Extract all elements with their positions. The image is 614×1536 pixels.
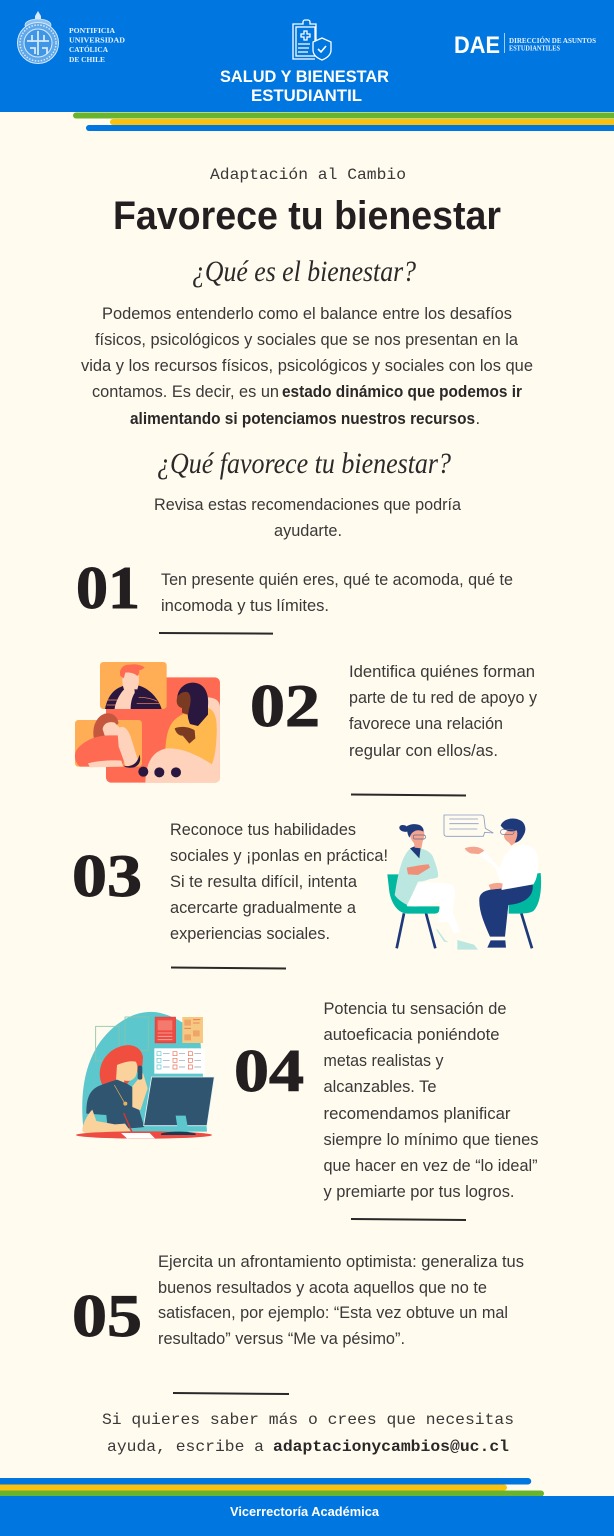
icon: clipboard with shield (293, 20, 331, 60)
item 04 (76, 1000, 538, 1201)
illustration: video call (75, 662, 220, 783)
text 03: sociales y ¡ponlas en práctica! (170, 847, 388, 865)
closing contact message: adaptacionycambios@uc.cl (273, 1438, 509, 1456)
text 05: resultado” versus “Me va pésimo”. (158, 1330, 405, 1348)
text 04: autoeficacia poniéndote (324, 1026, 500, 1044)
text 05: Ejercita un afrontamiento optimista: generaliza tus (158, 1253, 524, 1271)
text 03: experiencias sociales. (170, 925, 330, 943)
girl (93, 713, 119, 750)
text 03: acercarte gradualmente a (170, 899, 357, 917)
header band (0, 0, 614, 112)
text 03: Si te resulta difícil, intenta (170, 873, 358, 891)
text 01: incomoda y tus límites. (161, 597, 329, 615)
text 04: Potencia tu sensación de (324, 1000, 506, 1018)
text 03 (170, 821, 388, 943)
text 05: satisfacen, por ejemplo: “Esta vez obtuve un mal (158, 1304, 508, 1322)
illustration: woman at computer (76, 1012, 214, 1139)
heading: what is wellbeing: ¿Qué es el bienestar? (192, 255, 416, 288)
subtitle: Adaptación al Cambio (210, 166, 406, 184)
university name: PONTIFICIA (69, 26, 116, 35)
closing contact message: Si quieres saber más o crees que necesitas (102, 1411, 514, 1429)
text 04: siempre lo mínimo que tienes (324, 1131, 538, 1149)
illustration: two people talking (387, 815, 541, 950)
intro paragraph: físicos, psicológicos y sociales que se nos presentan en la (95, 331, 519, 349)
closing contact message (102, 1411, 514, 1456)
footer band (0, 1496, 614, 1536)
number 05: 05 (72, 1283, 142, 1349)
item 01 (76, 555, 513, 621)
text 01 (161, 571, 513, 615)
item 02 (75, 662, 538, 783)
text 03: Reconoce tus habilidades (170, 821, 356, 839)
text 02: parte de tu red de apoyo y (349, 689, 538, 707)
text 04 (324, 1000, 538, 1201)
text 04: que hacer en vez de “lo ideal” (324, 1157, 538, 1175)
intro paragraph: . (476, 410, 480, 428)
main title: Favorece tu bienestar (113, 194, 501, 238)
text 04: y premiarte por tus logros. (324, 1183, 514, 1201)
text 02: favorece una relación (349, 715, 503, 733)
program title: SALUD Y BIENESTAR (220, 68, 389, 86)
program title (220, 68, 389, 105)
text 04: metas realistas y (324, 1052, 444, 1070)
text 05 (158, 1253, 524, 1348)
footer band: Vicerrectoría Académica (230, 1504, 380, 1519)
text 04: recomendamos planificar (324, 1105, 511, 1123)
recommendation intro: ayudarte. (274, 522, 342, 540)
DAE logo: DAE (454, 32, 500, 59)
recommendation intro: Revisa estas recomendaciones que podría (154, 496, 462, 514)
number 01: 01 (76, 555, 140, 621)
intro paragraph: alimentando si potenciamos nuestros recursos (130, 410, 475, 428)
closing contact message: ayuda, escribe a (107, 1438, 264, 1456)
university name: DE CHILE (69, 55, 105, 64)
item 05 (72, 1253, 524, 1349)
item 03 (72, 815, 541, 950)
bottom coloured stripes (0, 1478, 544, 1496)
heading: what favours wellbeing: ¿Qué favorece tu bienestar? (157, 447, 451, 480)
icon: university crest (18, 11, 58, 64)
text 02 (349, 663, 538, 760)
intro paragraph: vida y los recursos físicos, psicológicos y sociales con los que (81, 357, 533, 375)
university name: CATÓLICA (69, 44, 109, 54)
intro paragraph: estado dinámico que podemos ir (282, 383, 523, 401)
intro paragraph: Podemos entenderlo como el balance entre los desafíos (102, 305, 512, 323)
university name: UNIVERSIDAD (69, 36, 125, 44)
text 04: alcanzables. Te (324, 1078, 436, 1096)
DAE logo: DIRECCIÓN DE ASUNTOS (509, 37, 596, 45)
text 02: regular con ellos/as. (349, 742, 498, 760)
intro paragraph: contamos. Es decir, es un (92, 383, 279, 401)
text 05: buenos resultados y acota aquellos que no te (158, 1279, 487, 1297)
top coloured stripes (73, 112, 614, 131)
number 02: 02 (250, 673, 320, 739)
number 04: 04 (234, 1038, 304, 1104)
DAE logo: ESTUDIANTILES (509, 44, 560, 52)
text 01: Ten presente quién eres, qué te acomoda, qué te (161, 571, 513, 589)
intro paragraph (81, 305, 533, 428)
program title: ESTUDIANTIL (251, 87, 362, 105)
woman (165, 708, 217, 767)
text 02: Identifica quiénes forman (349, 663, 535, 681)
DAE logo (454, 32, 596, 59)
number 03: 03 (72, 843, 142, 909)
recommendation intro (154, 496, 462, 540)
man (105, 686, 162, 709)
university name (69, 26, 125, 64)
